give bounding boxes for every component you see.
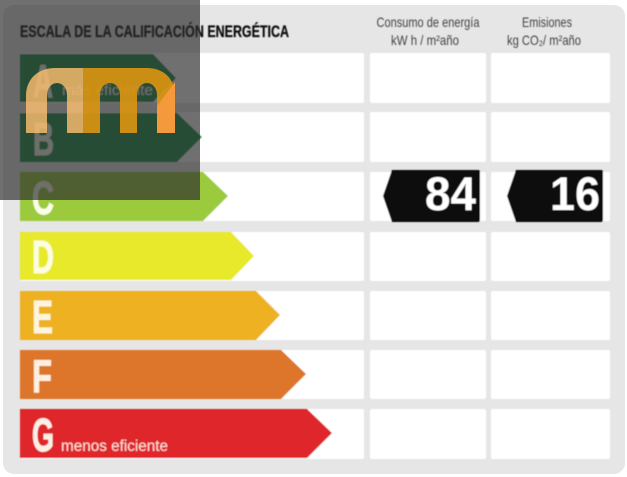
column heading: emissions: kg CO₂/ m²año xyxy=(507,32,581,48)
arrow: A: más eficiente xyxy=(62,82,153,99)
arrow: D: D xyxy=(32,231,54,283)
arrow: G: menos eficiente xyxy=(61,438,168,455)
arrow: B: B xyxy=(33,113,54,165)
logo letter m xyxy=(83,68,175,133)
arrow: F: F xyxy=(32,350,52,402)
value tag: energy consumption 84: 84 xyxy=(425,167,476,220)
arrow: E: E xyxy=(32,291,53,343)
column heading: energy consumption: kW h / m²año xyxy=(391,32,459,48)
arrow: G xyxy=(20,409,332,461)
arrow: E xyxy=(20,291,280,343)
watermark overlay xyxy=(0,0,200,200)
logo letter n xyxy=(26,68,83,133)
arrow: F xyxy=(20,350,306,402)
logo highlight xyxy=(157,82,175,133)
logo: nm watermark xyxy=(26,68,175,133)
arrow: G: G xyxy=(32,409,54,461)
arrow: A: A xyxy=(33,55,53,107)
value tag: emissions 16: 16 xyxy=(550,167,600,220)
column heading: emissions: Emisiones xyxy=(522,14,572,30)
arrow: D xyxy=(20,231,254,283)
arrow: C: C xyxy=(32,172,54,224)
arrow: B xyxy=(20,113,202,165)
column heading: energy consumption xyxy=(376,14,480,48)
value tag: energy consumption 84 xyxy=(383,167,480,222)
arrow: A xyxy=(20,54,176,107)
column heading: energy consumption: Consumo de energía xyxy=(376,14,480,30)
column heading: emissions xyxy=(507,14,581,48)
arrow: C xyxy=(20,172,228,224)
value tag: emissions 16 xyxy=(507,167,603,222)
title: ESCALA DE LA CALIFICACIÓN ENERGÉTICA xyxy=(20,22,289,41)
